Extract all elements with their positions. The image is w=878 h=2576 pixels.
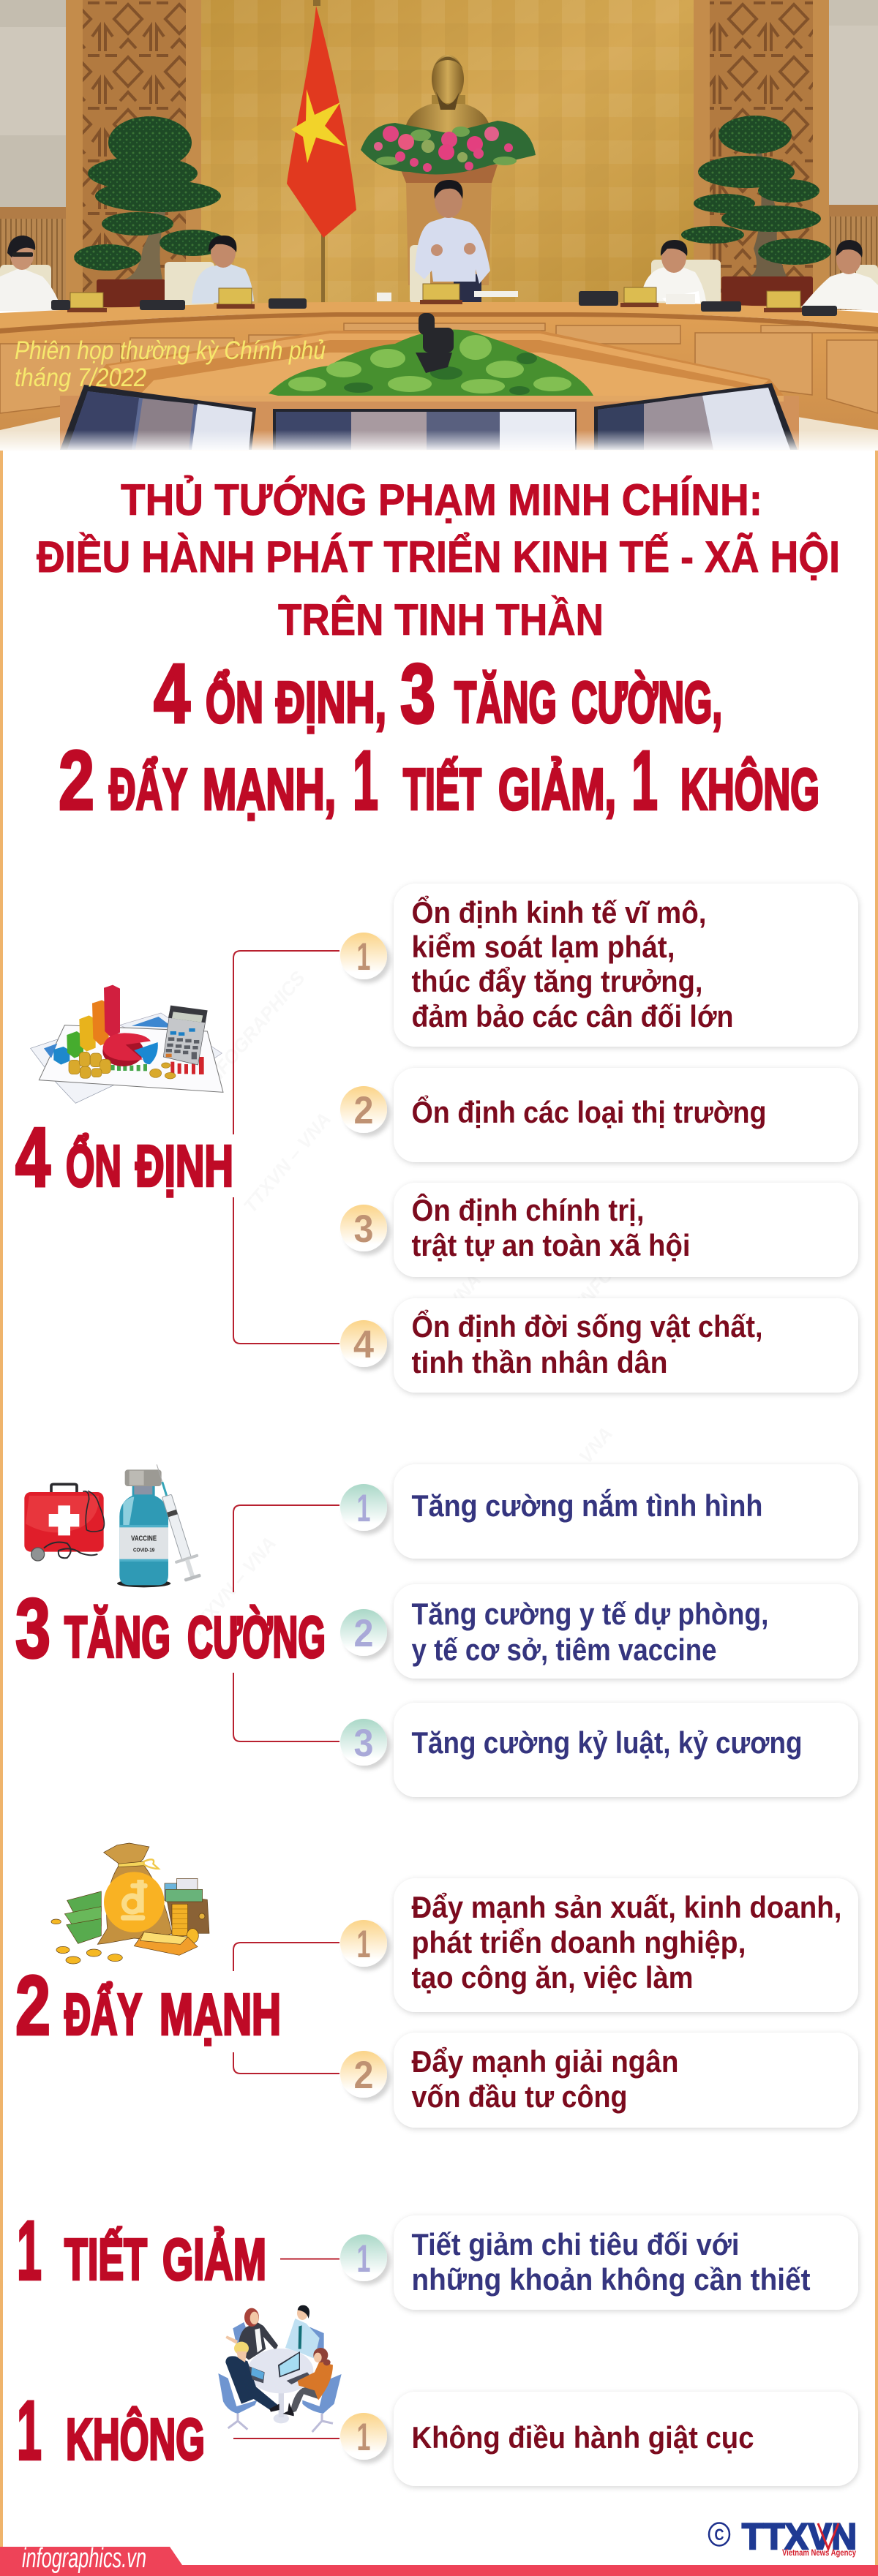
- caption: Phiên họp thường kỳ Chính phủ: [15, 336, 326, 365]
- watermarks: TTXVN – VNA: [239, 1108, 335, 1217]
- slogan line 2: 1: [353, 734, 378, 828]
- title line 1: THỦ TƯỚNG PHẠM MINH CHÍNH:: [121, 475, 762, 524]
- slogan line 2: GIẢM,: [498, 756, 616, 822]
- bottom fade: [0, 430, 878, 456]
- item 1: kiểm soát lạm phát,: [411, 930, 675, 964]
- panel: 1 không: [17, 2305, 858, 2486]
- item 1: 1: [357, 2237, 370, 2281]
- heading: 1 không: [17, 2384, 205, 2478]
- heading: 4 ổn định: 4: [15, 1110, 50, 1204]
- nameplates and microphones: [51, 284, 837, 316]
- lectern: [399, 165, 498, 285]
- heading: 1 tiết giảm: 1: [17, 2204, 42, 2298]
- heading: 4 ổn định: [15, 1110, 233, 1204]
- item 3: trật tự an toàn xã hội: [411, 1228, 691, 1262]
- item 1: Không điều hành giật cục: [411, 2420, 754, 2455]
- item 1: [340, 884, 858, 1047]
- caption: [15, 336, 326, 392]
- slogan line 2: [59, 734, 819, 828]
- heading: 4 ổn định: ỔN: [66, 1134, 121, 1198]
- item 4: [340, 1298, 858, 1393]
- connector line: [280, 2259, 339, 2260]
- floor: [0, 410, 878, 453]
- item 3: 3: [354, 1722, 373, 1765]
- item 3: 3: [354, 1208, 373, 1251]
- logo: TTXVN: Vietnam News Agency: [782, 2547, 856, 2558]
- heading: 1 tiết giảm: [17, 2204, 266, 2298]
- heading: 2 đẩy mạnh: ĐẨY: [64, 1982, 142, 2046]
- item 2: 2: [354, 2054, 373, 2097]
- slogan line 2: ĐẨY: [109, 756, 187, 822]
- slogan line 1: TĂNG: [454, 670, 557, 734]
- slogan line 1: 4: [154, 647, 190, 740]
- item 3: [340, 1183, 858, 1277]
- item 1: 1: [357, 1487, 370, 1530]
- item 1: thúc đẩy tăng trưởng,: [411, 964, 702, 998]
- item 1: [340, 2392, 858, 2486]
- heading: 3 tăng cường: [15, 1581, 326, 1675]
- item 1: đảm bảo các cân đối lớn: [411, 999, 733, 1033]
- heading: 3 tăng cường: TĂNG: [64, 1605, 170, 1669]
- connector lines: [233, 951, 339, 1344]
- panel: 3 tăng cường: [15, 1461, 858, 1797]
- heading: 3 tăng cường: CƯỜNG: [187, 1605, 326, 1669]
- connector lines: [233, 1943, 339, 2074]
- table plants: [269, 329, 593, 396]
- slogan line 1: ỔN: [206, 670, 263, 734]
- person: left: [0, 236, 62, 311]
- item 1: [340, 2215, 858, 2310]
- heading: 4 ổn định: ĐỊNH: [135, 1134, 233, 1198]
- heading: 1 tiết giảm: TIẾT: [64, 2226, 147, 2292]
- watermarks: INFOGRAPHICS: [572, 1186, 683, 1312]
- heading: 2 đẩy mạnh: [15, 1959, 281, 2052]
- heading: 1 không: KHÔNG: [66, 2406, 205, 2472]
- item 2: Tăng cường y tế dự phòng,: [411, 1597, 768, 1631]
- heading: 1 tiết giảm: GIẢM: [162, 2226, 266, 2292]
- item 3: Ôn định chính trị,: [411, 1192, 644, 1227]
- heading: 2 đẩy mạnh: MẠNH: [160, 1982, 281, 2046]
- watermarks: TTXVN – VNA: [521, 1423, 617, 1532]
- left grey wall: [0, 0, 69, 310]
- panel: 4 ổn định: [15, 884, 858, 1393]
- icon: medical kit and vaccine: VACCINE: [131, 1535, 157, 1543]
- item 4: 4: [353, 1323, 374, 1366]
- item 2: 2: [354, 1089, 373, 1132]
- icon: medical kit and vaccine: COVID-19: [133, 1547, 154, 1553]
- lower wood front: [0, 313, 878, 430]
- logo: TTXVN: C: [714, 2526, 724, 2544]
- item 1: [340, 1464, 858, 1559]
- photo: government meeting: [0, 0, 878, 456]
- watermarks: [184, 966, 683, 1641]
- item 3: [340, 1703, 858, 1797]
- icon: finance charts: [31, 985, 223, 1103]
- right grey wall: [829, 0, 878, 310]
- footer bar: [0, 2543, 878, 2576]
- person: second left: [192, 236, 254, 304]
- connector line: [233, 2438, 339, 2439]
- watermarks: TTXVN – VNA: [184, 1532, 280, 1641]
- icon: meeting people: [218, 2305, 342, 2432]
- video screens: [60, 383, 798, 450]
- right carved column: [694, 0, 829, 315]
- camera: [416, 313, 454, 373]
- slogan line 1: ĐỊNH,: [276, 670, 386, 734]
- gold wall: [200, 0, 694, 315]
- item 2: y tế cơ sở, tiêm vaccine: [411, 1632, 717, 1667]
- item 2: 2: [354, 1612, 373, 1655]
- item 2: vốn đầu tư công: [411, 2079, 628, 2114]
- chairs: [0, 245, 878, 306]
- item 1: tạo công ăn, việc làm: [411, 1960, 694, 1995]
- octagonal inner table: [60, 331, 799, 450]
- slogan line 1: CƯỜNG,: [571, 670, 722, 734]
- item 2: Đẩy mạnh giải ngân: [411, 2044, 679, 2079]
- statue bust: [404, 55, 492, 139]
- panel: 2 đẩy mạnh: [15, 1843, 858, 2128]
- item 1: Tiết giảm chi tiêu đối với: [411, 2227, 739, 2261]
- bonsai right: [681, 116, 831, 306]
- person: far right: [801, 240, 878, 311]
- flag: [287, 0, 356, 304]
- item 4: Ổn định đời sống vật chất,: [411, 1308, 762, 1344]
- item 1: 1: [357, 1923, 370, 1966]
- person: third right: [640, 240, 706, 306]
- flower arrangement: [361, 121, 536, 174]
- item 2: Ổn định các loại thị trường: [411, 1093, 767, 1129]
- icon: medical kit and vaccine: [24, 1461, 205, 1587]
- item 1: Ổn định kinh tế vĩ mô,: [411, 894, 707, 930]
- slogan line 1: 3: [400, 647, 435, 740]
- item 4: tinh thần nhân dân: [411, 1345, 667, 1379]
- heading: 1 không: 1: [17, 2384, 42, 2478]
- item 2: [340, 2033, 858, 2128]
- title: [37, 475, 840, 828]
- item 1: 1: [357, 935, 370, 979]
- left carved column: [66, 0, 201, 315]
- panel: 1 tiết giảm: [17, 2204, 858, 2310]
- item 3: Tăng cường kỷ luật, kỷ cương: [411, 1725, 802, 1760]
- heading: 3 tăng cường: 3: [15, 1581, 50, 1675]
- bonsai left: [74, 116, 227, 307]
- slogan line 1: [154, 647, 722, 740]
- person: prime minister: [415, 180, 490, 302]
- title line 3: TRÊN TINH THẦN: [278, 595, 604, 644]
- slogan line 2: 1: [631, 734, 658, 828]
- caption: tháng 7/2022: [15, 364, 146, 392]
- connector lines: [233, 1505, 339, 1741]
- item 1: [340, 1878, 858, 2012]
- curved table top: [0, 302, 878, 334]
- item 1: Tăng cường nắm tình hình: [411, 1488, 762, 1523]
- item 1: phát triển doanh nghiệp,: [411, 1925, 746, 1959]
- item 2: [340, 1584, 858, 1679]
- logo: TTXVN: TTXVN: [742, 2516, 857, 2557]
- heading: 2 đẩy mạnh: 2: [15, 1959, 50, 2052]
- footer bar: infographics.vn: [22, 2543, 146, 2574]
- item 1: 1: [357, 2416, 370, 2459]
- slogan line 2: MẠNH,: [203, 756, 336, 822]
- item 1: Đẩy mạnh sản xuất, kinh doanh,: [411, 1890, 841, 1924]
- item 1: những khoản không cần thiết: [411, 2262, 811, 2297]
- item 2: [340, 1068, 858, 1162]
- icon: money bag: [51, 1843, 209, 1964]
- watermarks: TTXVN – VNA: [389, 1269, 485, 1378]
- slogan line 2: 2: [59, 734, 94, 828]
- watermarks: INFOGRAPHICS: [199, 966, 309, 1093]
- slogan line 2: TIẾT: [403, 756, 481, 822]
